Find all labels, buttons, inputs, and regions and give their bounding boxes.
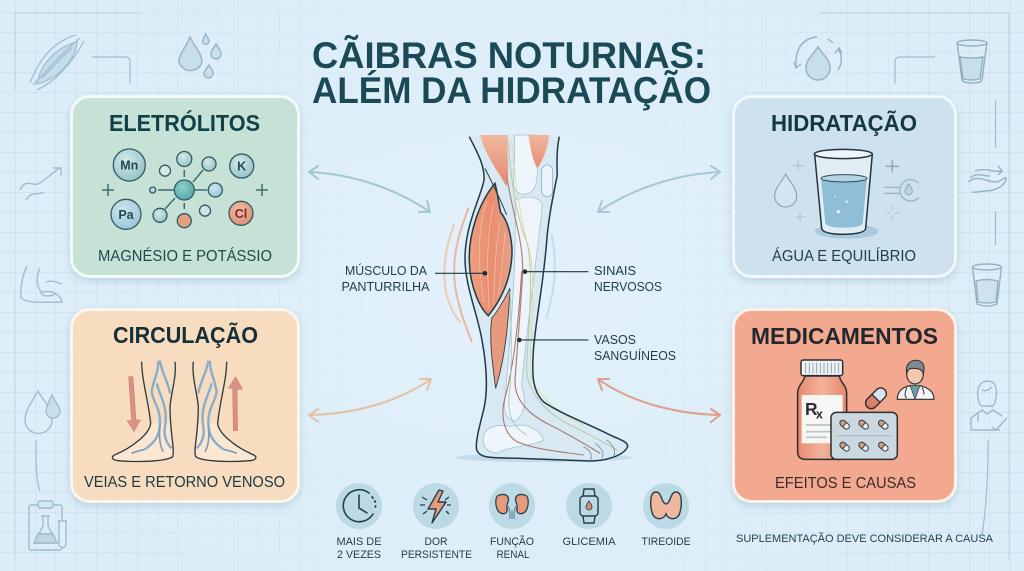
arrow: hidratação to leg <box>598 166 720 212</box>
molecule diagram: Pa <box>118 208 135 222</box>
molecule diagram: K <box>237 160 246 174</box>
label: sinais nervosos: NERVOSOS <box>594 279 662 294</box>
indicator: tireoide <box>642 483 690 548</box>
label: vasos sanguíneos <box>594 332 676 363</box>
illustration: glass of water <box>775 149 919 239</box>
illustration: legs with veins and flow arrows <box>112 361 256 461</box>
icon: female doctor <box>971 381 1007 430</box>
caption: água e equilíbrio: ÁGUA E EQUILÍBRIO <box>772 246 916 265</box>
heading: hidratação: HIDRATAÇÃO <box>771 109 917 136</box>
icon: glass top right <box>957 40 987 83</box>
icon: muscle fibres <box>30 35 84 90</box>
caption: efeitos e causas: EFEITOS E CAUSAS <box>775 475 916 492</box>
indicator: dor persistente: PERSISTENTE <box>401 549 472 561</box>
indicator: glicemia: GLICEMIA <box>562 536 616 548</box>
molecule diagram: Cl <box>235 207 247 221</box>
icon: flexed arm <box>21 266 62 302</box>
heading: circulação: CIRCULAÇÃO <box>113 321 258 348</box>
label: vasos sanguíneos: VASOS <box>594 332 636 347</box>
title: ALÉM DA HIDRATAÇÃO <box>312 69 711 111</box>
title <box>312 34 711 111</box>
icon: water drops <box>179 34 221 78</box>
icon: trend chart left <box>20 168 61 200</box>
caption: magnésio e potássio: MAGNÉSIO E POTÁSSIO <box>98 246 272 265</box>
illustration: medicine bottle, pills and doctor <box>798 360 934 459</box>
illustration: medicine bottle, pills and doctor: R <box>805 399 818 419</box>
arrow: medicamentos to leg <box>598 379 720 422</box>
indicator: mais de 2 vezes: MAIS DE <box>336 536 382 548</box>
label: músculo da panturrilha: PANTURRILHA <box>342 279 430 294</box>
label: sinais nervosos: SINAIS <box>594 263 636 278</box>
indicator: mais de 2 vezes: 2 VEZES <box>337 549 381 561</box>
icon: hand with arrow <box>968 166 1006 192</box>
title: CÃIBRAS NOTURNAS: <box>312 34 706 76</box>
label: músculo da panturrilha <box>342 263 430 294</box>
panel: hidratação <box>734 96 956 276</box>
indicator: tireoide: TIREOIDE <box>642 536 690 548</box>
icon: water cycle <box>794 37 842 80</box>
leader line: sinais nervosos <box>523 269 588 274</box>
leader line: vasos sanguíneos <box>517 338 588 342</box>
label: vasos sanguíneos: SANGUÍNEOS <box>594 348 676 363</box>
illustration: medicine bottle, pills and doctor: x <box>816 407 823 421</box>
icon: clipboard flask <box>29 501 67 550</box>
panel: eletrólitos <box>72 96 298 276</box>
indicator: dor persistente: DOR <box>424 536 448 548</box>
icon: two drops left <box>25 391 60 434</box>
molecule diagram <box>102 149 268 229</box>
label: sinais nervosos <box>594 263 662 294</box>
icon: glass right side <box>972 264 1002 306</box>
leader line: músculo da panturrilha <box>435 271 487 276</box>
indicator: glicemia <box>562 483 616 548</box>
panel: circulação <box>72 310 298 502</box>
molecule diagram: Mn <box>120 158 138 172</box>
label: músculo da panturrilha: MÚSCULO DA <box>345 263 427 278</box>
indicator: dor persistente <box>401 483 472 561</box>
caption: veias e retorno venoso: VEIAS E RETORNO VENOSO <box>84 474 285 491</box>
panel: medicamentos <box>734 310 956 502</box>
heading: eletrólitos: ELETRÓLITOS <box>109 109 260 136</box>
indicator: mais de 2 vezes <box>336 483 382 561</box>
indicator: função renal <box>489 483 535 561</box>
arrow: eletrólitos to leg <box>309 166 430 212</box>
suplementação note: SUPLEMENTAÇÃO DEVE CONSIDERAR A CAUSA <box>736 532 994 545</box>
indicator: função renal: RENAL <box>496 549 530 561</box>
arrow: circulação to leg <box>309 379 431 422</box>
heading: medicamentos: MEDICAMENTOS <box>751 323 938 349</box>
illustration: leg anatomy <box>435 135 632 462</box>
indicator: função renal: FUNÇÃO <box>490 535 534 548</box>
